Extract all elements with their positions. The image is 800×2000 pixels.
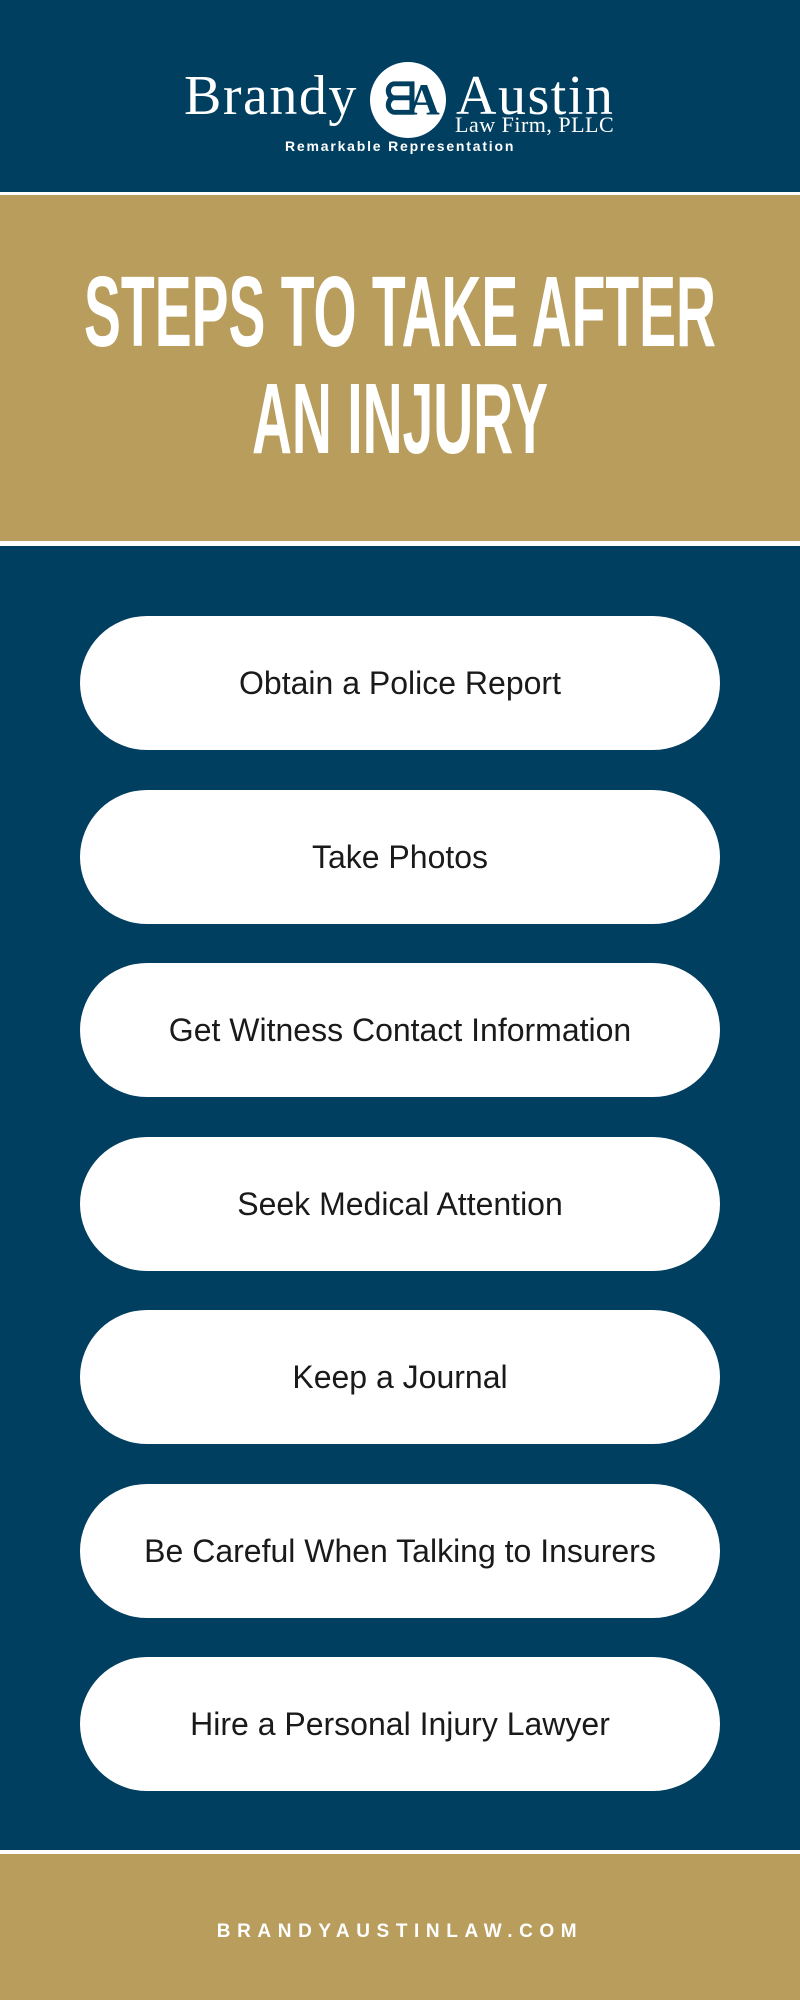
step 2: Take Photos [312,838,488,874]
tagline: Remarkable Representation [285,138,515,154]
logo text: Law Firm: Law Firm, PLLC [455,112,614,137]
step 2 [80,790,720,924]
step 1 [80,616,720,750]
step 3: Get Witness Contact Information [169,1012,631,1048]
step 4 [80,1137,720,1271]
step 5: Keep a Journal [292,1358,508,1394]
logo icon: BA circle: ᗺA [384,75,432,124]
step 1: Obtain a Police Report [239,664,561,700]
title: STEPS TO TAKE AFTER [84,256,716,368]
step 6 [80,1484,720,1618]
step 3 [80,963,720,1097]
footer [0,1854,800,2000]
logo icon: BA circle [370,62,446,138]
step 7 [80,1657,720,1791]
step 5 [80,1310,720,1444]
logo text: Austin: Austin [456,65,614,127]
title: AN INJURY [252,363,548,475]
step 4: Seek Medical Attention [237,1186,563,1222]
steps panel [80,616,720,1791]
title [84,256,716,475]
step 7: Hire a Personal Injury Lawyer [190,1706,610,1742]
footer url: BRANDYAUSTINLAW.COM [217,1921,583,1942]
title panel [0,195,800,541]
logo text: Brandy: Brandy [184,65,358,127]
header logo [0,0,800,192]
step 6: Be Careful When Talking to Insurers [144,1532,656,1568]
